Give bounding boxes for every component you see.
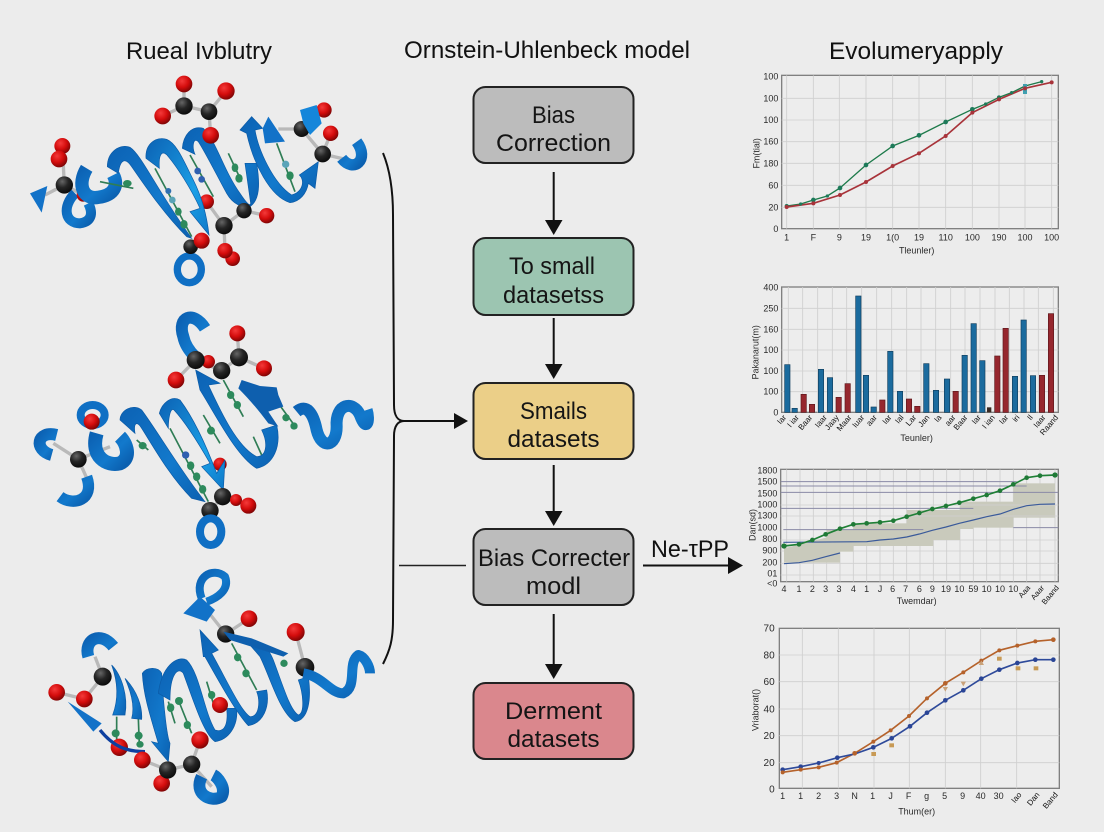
connector line left of box 4 xyxy=(399,564,466,566)
chart 1: line chart: F xyxy=(811,232,817,242)
flow box: Derment datasets xyxy=(474,683,634,759)
chart 1: line chart: 180 xyxy=(763,158,778,168)
chart 1: line chart: 9 xyxy=(837,232,842,242)
chart 4: line chart: 1 xyxy=(798,791,803,801)
chart 4: line chart: 1 xyxy=(780,791,785,801)
protein structure 1 xyxy=(30,76,362,283)
arrow label: Ne-τPP xyxy=(651,536,729,563)
chart 3: line chart with bands: 9 xyxy=(930,584,935,594)
chart 3: line chart with bands: Baand xyxy=(1040,583,1061,606)
chart 2: bar chart: 400 xyxy=(763,282,778,292)
chart 4: line chart: Thum(er) xyxy=(898,806,935,816)
chart 4: line chart: Band xyxy=(1041,790,1060,811)
chart 1: line chart: 60 xyxy=(768,180,778,190)
chart 2: bar chart: Iuar xyxy=(850,413,866,429)
chart 3: line chart with bands: Twemdar) xyxy=(897,596,937,606)
chart 2: bar chart: Iar xyxy=(970,413,983,426)
chart 3: line chart with bands: Aaa xyxy=(1017,583,1033,600)
chart 4: line chart: 2 xyxy=(816,791,821,801)
chart 4: line chart: J xyxy=(888,791,893,801)
chart 2: bar chart: Jan xyxy=(916,413,932,429)
chart 1: line chart: 100 xyxy=(763,72,778,82)
chart 2: bar chart: aar xyxy=(943,413,958,428)
chart 1: line chart: Fm(tial) xyxy=(751,138,761,169)
flow box: Bias Correction xyxy=(474,87,634,163)
arrow: box 3 to box 4 xyxy=(545,465,562,526)
chart 1: line chart: 100 xyxy=(763,115,778,125)
flow box: Smails datasets xyxy=(474,383,634,459)
chart 2: bar chart: Il xyxy=(1025,413,1035,422)
chart 2: bar chart: 0 xyxy=(773,407,778,417)
chart 2: bar chart: 100 xyxy=(763,387,778,397)
chart 3: line chart with bands: 01 xyxy=(767,569,777,579)
flow box: Derment datasets: datasets xyxy=(508,726,600,753)
chart 3: line chart with bands: 1800 xyxy=(757,465,777,475)
chart 3: line chart with bands: 200 xyxy=(762,557,777,567)
chart 3: line chart with bands: Aaar xyxy=(1029,583,1046,602)
chart 3: line chart with bands: 10 xyxy=(982,584,992,594)
chart 3: line chart with bands: 1 xyxy=(796,584,801,594)
chart 4: line chart: 30 xyxy=(994,791,1004,801)
flow box: To small datasets: To small xyxy=(509,253,595,280)
chart 3: line chart with bands: 900 xyxy=(762,545,777,555)
chart 2: bar chart: 100 xyxy=(763,345,778,355)
chart 3: line chart with bands: 10 xyxy=(954,584,964,594)
chart 3: line chart with bands: 10 xyxy=(1008,584,1018,594)
chart 4: line chart: 60 xyxy=(764,677,775,688)
chart 1: line chart: 0 xyxy=(773,224,778,234)
chart 3: line chart with bands: 19 xyxy=(941,584,951,594)
chart 2: bar chart: Baar xyxy=(796,413,814,432)
chart 3: line chart with bands: 1300 xyxy=(757,511,777,521)
flow box: Smails datasets: datasets xyxy=(508,426,600,453)
chart 1: line chart: 1 xyxy=(784,232,789,242)
flow box: To small datasets: datasetss xyxy=(503,282,604,309)
arrow: box 2 to box 3 xyxy=(545,318,562,379)
chart 2: bar chart: Ial xyxy=(893,413,906,425)
title: center column: Ornstein-Uhlenbeck model xyxy=(404,37,690,64)
chart 2: bar chart: Raand xyxy=(1038,413,1060,437)
chart 3: line chart with bands: 2 xyxy=(810,584,815,594)
bars xyxy=(785,296,1036,412)
chart 2: bar chart: Iar xyxy=(997,413,1010,426)
flow box: To small datasets xyxy=(474,238,634,315)
chart 2: bar chart: Pakanarut(m) xyxy=(751,325,761,380)
flow box: Derment datasets: Derment xyxy=(505,698,602,725)
chart 3: line chart with bands: 6 xyxy=(890,584,895,594)
chart 1: line chart: 1(0 xyxy=(886,232,899,242)
chart 3: line chart with bands xyxy=(747,465,1061,606)
chart 4: line chart: 40 xyxy=(976,791,986,801)
chart 2: bar chart: 160 xyxy=(763,324,778,334)
chart 2: bar chart: 100 xyxy=(763,366,778,376)
chart 3: line chart with bands: 1500 xyxy=(757,477,777,487)
chart 4: line chart: 70 xyxy=(764,624,775,635)
chart 1: line chart: 19 xyxy=(914,232,924,242)
chart 3: line chart with bands: 4 xyxy=(851,584,856,594)
chart 2: bar chart: iri xyxy=(1011,413,1022,424)
chart 3: line chart with bands: 800 xyxy=(762,534,777,544)
chart 2: bar chart: 250 xyxy=(763,303,778,313)
chart 2: bar chart: Iar xyxy=(881,413,894,426)
flow box: Smails datasets: Smails xyxy=(520,398,587,425)
chart 2: bar chart: Iaar xyxy=(1032,413,1048,429)
flow box: Bias Correcter model: Bias Correcter xyxy=(478,545,630,572)
chart 4: line chart: 20 xyxy=(764,758,775,769)
chart 4: line chart: Dan xyxy=(1025,790,1042,808)
chart 4: line chart: N xyxy=(851,791,858,801)
title: right column: Evolumeryapply xyxy=(829,38,1004,65)
chart 3: line chart with bands: 1 xyxy=(864,584,869,594)
chart 2: bar chart: Baar xyxy=(952,413,970,432)
chart 2: bar chart: Lar xyxy=(904,413,918,428)
chart 1: line chart: 100 xyxy=(1044,232,1059,242)
chart 3: line chart with bands: 59 xyxy=(968,584,978,594)
chart 3: line chart with bands: 10 xyxy=(995,584,1005,594)
chart 1: line chart: 20 xyxy=(768,202,778,212)
chart 2: bar chart xyxy=(751,282,1060,443)
chart 4: line chart: 9 xyxy=(960,791,965,801)
chart 1: line chart: 19 xyxy=(861,232,871,242)
chart 3: line chart with bands: J xyxy=(878,584,882,594)
chart 2: bar chart: Teunler) xyxy=(900,433,933,443)
chart 1: line chart: 100 xyxy=(1017,232,1032,242)
arrow: box 1 to box 2 xyxy=(545,172,562,235)
arrow: box 4 to box 5 xyxy=(545,614,562,679)
chart 2: bar chart: Maar xyxy=(835,413,854,433)
title: left column: Rueal Ivblutry xyxy=(126,38,273,65)
protein structure 3 xyxy=(48,573,370,799)
chart 1: line chart: 110 xyxy=(939,232,953,242)
chart 4: line chart: 40 xyxy=(764,704,775,715)
chart 4: line chart: 3 xyxy=(834,791,839,801)
chart 2: bar chart: I ian xyxy=(980,413,997,431)
chart 4: line chart: 80 xyxy=(764,650,775,661)
chart 1: line chart: 190 xyxy=(991,232,1006,242)
chart 4: line chart: Vriaborat() xyxy=(751,689,761,731)
chart 2: bar chart: Iar xyxy=(775,413,788,426)
flow box: Bias Correction: Bias xyxy=(532,102,575,129)
chart 4: line chart: Iao xyxy=(1009,790,1024,805)
chart 4: line chart: 1 xyxy=(870,791,875,801)
chart 1: line chart: 160 xyxy=(763,137,778,147)
chart 4: line chart: 5 xyxy=(942,791,947,801)
chart 2: bar chart: Jaay xyxy=(823,413,841,432)
chart 4: line chart: F xyxy=(906,791,912,801)
chart 2: bar chart: Ia xyxy=(932,413,944,424)
flow box: Bias Correcter model xyxy=(474,529,634,605)
chart 3: line chart with bands: 1000 xyxy=(757,500,777,510)
chart 3: line chart with bands: 7 xyxy=(903,584,908,594)
chart 3: line chart with bands: Dan(sd) xyxy=(747,509,757,541)
bracket from proteins to flow xyxy=(383,153,468,664)
chart 1: line chart: Tleunler) xyxy=(899,246,934,256)
chart 4: line chart: g xyxy=(924,791,929,801)
chart 4: line chart: 0 xyxy=(769,784,775,795)
chart 3: line chart with bands: 1500 xyxy=(757,488,777,498)
flow box: Bias Correction: Correction xyxy=(496,130,611,157)
chart 3: line chart with bands: 6 xyxy=(917,584,922,594)
chart 1: line chart: 100 xyxy=(763,93,778,103)
chart 2: bar chart: I iar xyxy=(785,413,801,429)
chart 4: line chart xyxy=(751,624,1060,816)
protein structure 2 xyxy=(40,318,368,545)
chart 2: bar chart: aar xyxy=(865,413,879,428)
arrow: model to charts xyxy=(643,557,743,574)
chart 3: line chart with bands: <0 xyxy=(767,579,777,589)
chart 3: line chart with bands: 1000 xyxy=(757,522,777,532)
chart 3: line chart with bands: 4 xyxy=(781,584,786,594)
chart 4: line chart: 20 xyxy=(764,731,775,742)
chart 1: line chart: 100 xyxy=(965,232,980,242)
chart 3: line chart with bands: 3 xyxy=(836,584,841,594)
chart 1: line chart xyxy=(751,72,1059,256)
chart 2: bar chart: Iaar xyxy=(813,413,829,429)
chart 3: line chart with bands: 3 xyxy=(823,584,828,594)
flow box: Bias Correcter model: modl xyxy=(526,573,581,600)
